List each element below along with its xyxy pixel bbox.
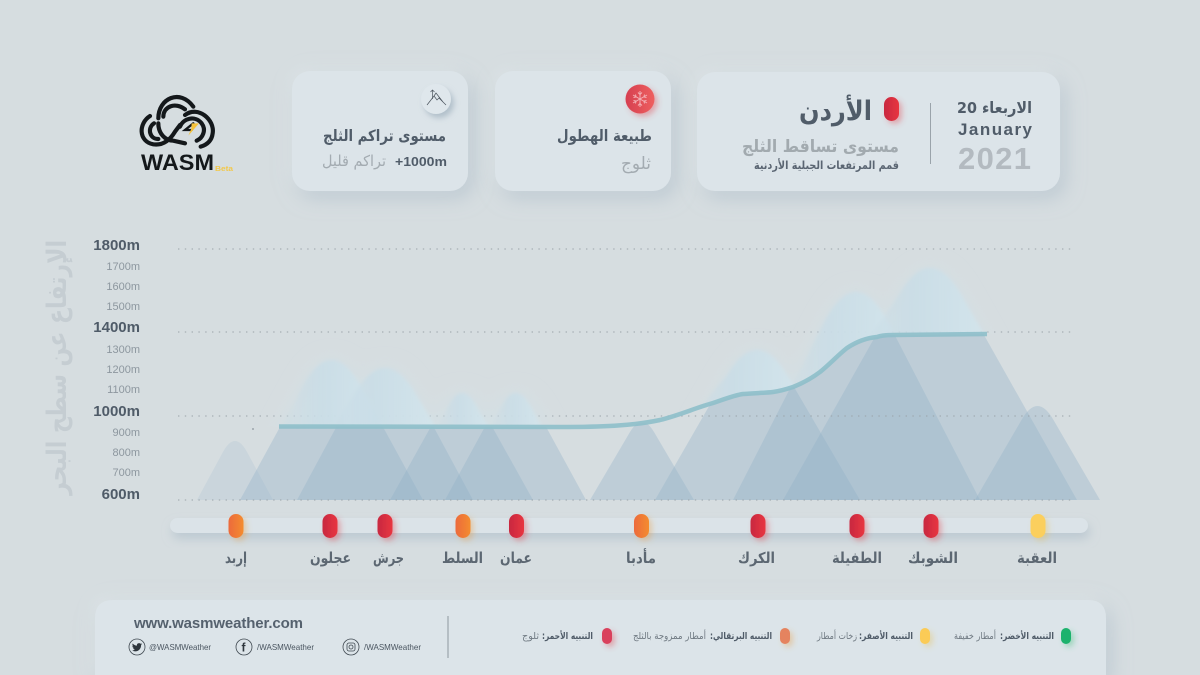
city labels: الشوبك: [908, 549, 958, 567]
axis labels: 1000m: [93, 403, 140, 420]
axis labels: 600m: [102, 486, 140, 503]
legend: orange alert: التنبيه البرتقالي:: [710, 631, 772, 642]
legend: red alert: ثلوج: [522, 631, 539, 642]
timeline track: [170, 518, 1088, 533]
city timeline: [170, 514, 1088, 567]
chart: mountains and snow line: [178, 249, 1100, 500]
mountains below snow line: [197, 336, 1100, 500]
date: weekday and day: الاربعاء 20: [957, 99, 1032, 117]
legend: red alert: [522, 628, 612, 644]
legend: green alert: [954, 628, 1071, 644]
legend: red alert: التنبيه الأحمر:: [542, 630, 593, 642]
social: twitter: [129, 639, 211, 655]
logo: WASM: [141, 97, 234, 175]
value: 1000m: +1000m: [395, 155, 447, 169]
axis labels: 1500m: [106, 301, 140, 313]
city labels: مأدبا: [626, 548, 656, 567]
logo wordmark: WASM: [141, 150, 214, 175]
legend: green alert: أمطار خفيفة: [954, 629, 996, 642]
axis labels: 800m: [112, 447, 140, 459]
social: instagram: /WASMWeather: [364, 642, 421, 652]
date: month: January: [958, 120, 1033, 139]
social: instagram: [343, 639, 421, 655]
snow line: [279, 334, 987, 427]
subheading: snowfall level: مستوى تساقط الثلج: [742, 137, 899, 157]
caption: Jordanian highland peaks: قمم المرتفعات الجبلية الأردنية: [754, 158, 899, 172]
city labels: السلط: [442, 549, 483, 567]
axis labels: 900m: [112, 427, 140, 439]
axis title: elevation above sea level: الإرتفاع عن سطح البحر: [42, 240, 73, 497]
legend: orange alert: [633, 628, 790, 644]
alert pills: [228, 514, 1046, 538]
panel: snow accumulation: [292, 71, 468, 191]
axis labels: 1400m: [93, 319, 140, 336]
axis labels: 1100m: [107, 384, 140, 396]
social: facebook: /WASMWeather: [257, 642, 314, 652]
panel: Jordan title and date: [697, 72, 1060, 191]
icon: snowflake: [626, 84, 654, 114]
axis labels: 700m: [112, 467, 140, 479]
city labels: عجلون: [310, 549, 351, 567]
city labels: [225, 548, 1057, 567]
status pill: red: [884, 97, 899, 121]
stray marker dot: [252, 428, 254, 430]
city labels: الطفيلة: [832, 549, 882, 567]
city labels: إربد: [225, 549, 247, 567]
city labels: عمان: [500, 549, 532, 567]
divider: [930, 103, 931, 164]
date: year: 2021: [958, 141, 1031, 176]
social: facebook: f: [242, 640, 246, 654]
legend: yellow alert: زخات أمطار: [816, 629, 857, 642]
grid lines: [178, 249, 1073, 500]
icon: cloud logo: [142, 97, 213, 147]
website url: www.wasmweather.com: [133, 615, 303, 632]
panel: footer: [95, 600, 1106, 675]
axis labels: 1600m: [106, 281, 140, 293]
legend: green alert: التنبيه الأخضر:: [1000, 630, 1054, 642]
axis labels: 1200m: [106, 364, 140, 376]
social: twitter: @WASMWeather: [149, 642, 211, 652]
axis labels: [93, 237, 140, 503]
logo beta tag: Beta: [215, 164, 234, 173]
icon: mountain: [421, 84, 451, 114]
social: facebook: [236, 639, 314, 655]
city labels: الكرك: [738, 549, 775, 567]
axis labels: 1300m: [106, 344, 140, 356]
axis labels: 1800m: [93, 237, 140, 254]
panel: precipitation type: [495, 71, 671, 191]
legend: yellow alert: التنبيه الأصفر:: [859, 630, 913, 642]
city labels: العقبة: [1017, 549, 1057, 567]
heading: precipitation type: طبيعة الهطول: [557, 127, 652, 145]
snow caps above snow line: [280, 270, 982, 424]
axis labels: 1700m: [106, 261, 140, 273]
footer divider: [448, 616, 449, 658]
legend: orange alert: أمطار ممزوجة بالثلج: [633, 629, 706, 642]
value: low accumulation: تراكم قليل: [322, 152, 386, 170]
heading: snow accumulation level: مستوى تراكم الثلج: [323, 127, 446, 145]
value: snow: ثلوج: [621, 154, 651, 174]
legend: yellow alert: [816, 628, 930, 644]
city labels: جرش: [373, 549, 404, 567]
heading: Jordan: الأردن: [799, 94, 872, 127]
